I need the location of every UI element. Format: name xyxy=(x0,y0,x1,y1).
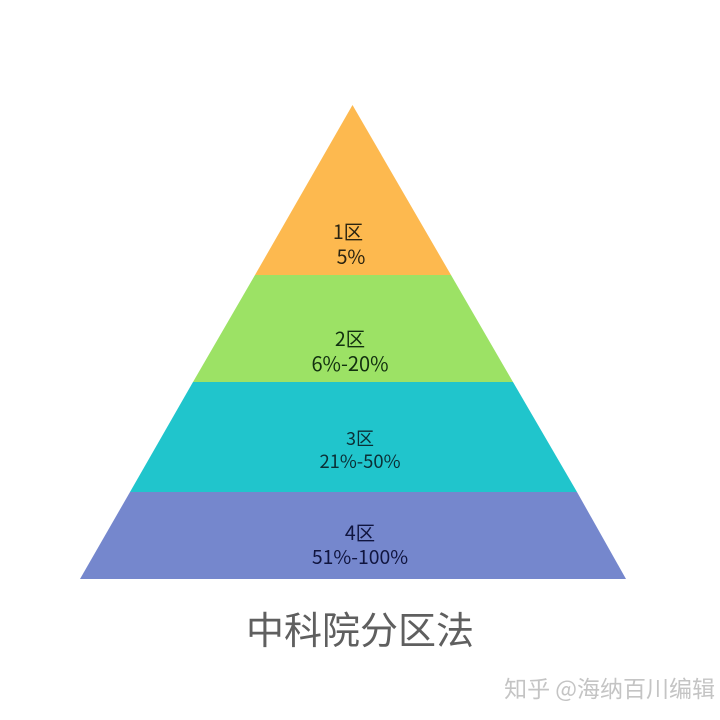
tier 4: bottom zone: 4区 xyxy=(345,517,375,546)
title: 中科院分区法 xyxy=(246,600,474,655)
tier 2: second zone: 2区 xyxy=(335,323,365,352)
tier 4: bottom zone: 51%-100% xyxy=(312,541,408,570)
tier 2: second zone: 6%-20% xyxy=(311,348,389,377)
tier 1: top zone xyxy=(255,105,451,275)
pyramid chart xyxy=(80,105,626,579)
tier 3: third zone: 3区 xyxy=(346,425,374,451)
tier 3: third zone: 21%-50% xyxy=(319,448,401,474)
tier 1: top zone: 1区 xyxy=(333,216,363,245)
tier 1: top zone: 5% xyxy=(337,241,365,270)
tier 3: third zone xyxy=(130,382,577,492)
watermark: 知乎 @海纳百川编辑 xyxy=(504,670,715,704)
tier 2: second zone xyxy=(193,275,513,382)
tier 4: bottom zone xyxy=(80,492,626,579)
